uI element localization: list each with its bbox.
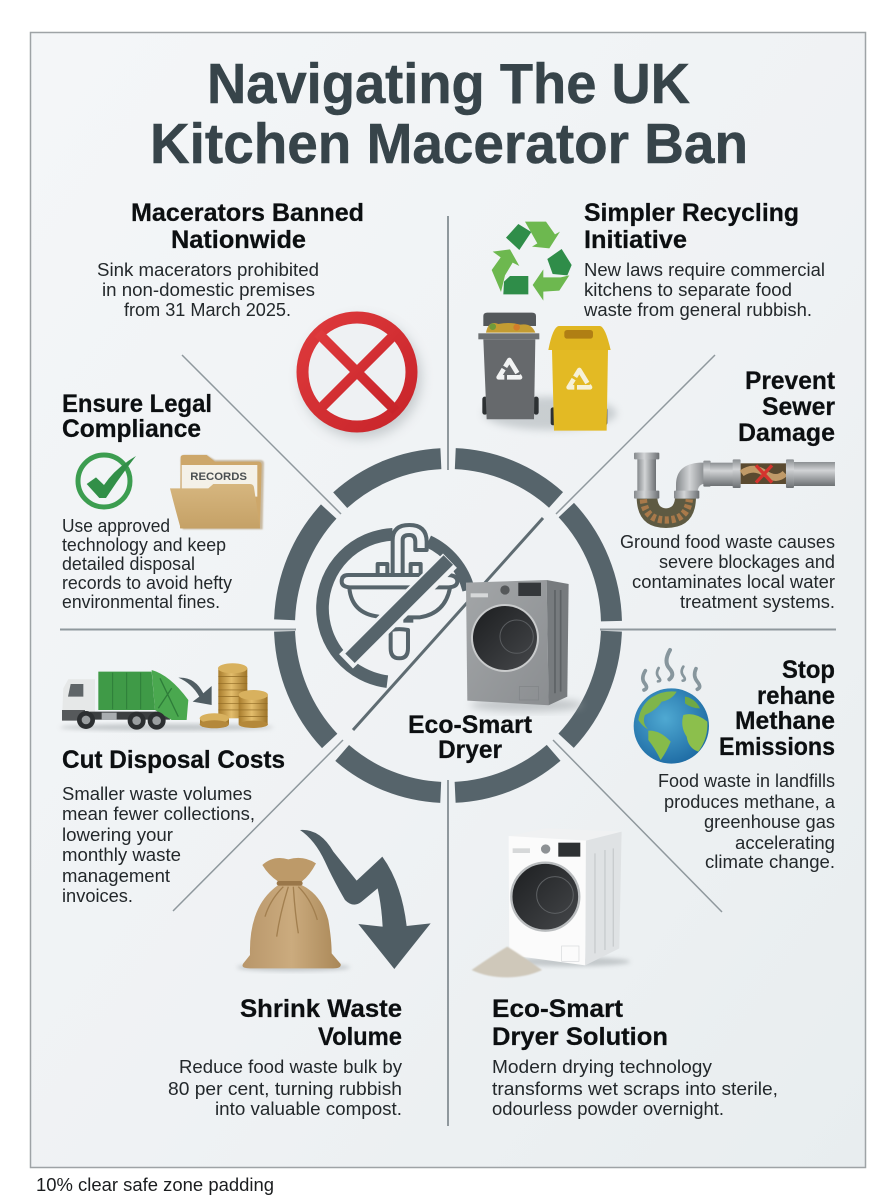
icon: recycling arrows bbox=[492, 222, 572, 301]
title bbox=[150, 52, 748, 176]
central hub: no-sink icon and dryer bbox=[322, 518, 583, 764]
icon: earth with methane wisps bbox=[634, 650, 709, 764]
icon: burlap sack bbox=[237, 858, 350, 971]
body text: New laws require commercial bbox=[584, 259, 825, 280]
heading: Simpler Recycling bbox=[584, 199, 799, 227]
label: Eco-Smart Dryer: Dryer bbox=[438, 736, 502, 764]
heading: Methane bbox=[735, 707, 835, 735]
body text: treatment systems. bbox=[680, 591, 835, 612]
divider spokes bbox=[60, 216, 836, 1126]
body text: Smaller waste volumes bbox=[62, 783, 252, 804]
heading bbox=[62, 390, 212, 443]
heading: Initiative bbox=[584, 226, 687, 254]
panel: ensure legal compliance bbox=[62, 390, 264, 612]
body text bbox=[97, 259, 319, 320]
heading: Shrink Waste bbox=[240, 995, 402, 1023]
heading: Macerators Banned bbox=[131, 199, 364, 227]
icon: red prohibition circle bbox=[301, 318, 421, 438]
icon: records folder: RECORDS bbox=[190, 471, 247, 483]
heading: Eco-Smart bbox=[492, 995, 624, 1023]
caption: 10% clear safe zone padding bbox=[36, 1175, 274, 1195]
panel: stop methane emissions bbox=[634, 650, 836, 872]
body text: monthly waste bbox=[62, 844, 181, 865]
body text: kitchens to separate food bbox=[584, 279, 792, 300]
heading: Sewer bbox=[762, 393, 835, 421]
body text: Ground food waste causes bbox=[620, 531, 835, 552]
heading bbox=[719, 656, 835, 761]
body text bbox=[62, 515, 233, 612]
body text: management bbox=[62, 865, 170, 886]
icon: prohibited sink bbox=[322, 525, 469, 682]
body text: transforms wet scraps into sterile, bbox=[492, 1078, 778, 1099]
heading: Volume bbox=[318, 1023, 402, 1051]
heading bbox=[584, 199, 799, 254]
heading: Nationwide bbox=[171, 226, 306, 254]
heading bbox=[131, 199, 364, 254]
body text: greenhouse gas bbox=[704, 811, 835, 832]
icon: white dryer and powder bbox=[472, 828, 630, 977]
panel: shrink waste volume bbox=[168, 830, 431, 1119]
body text: invoices. bbox=[62, 885, 133, 906]
heading: rehane bbox=[757, 682, 835, 710]
body text: records to avoid hefty bbox=[62, 572, 233, 593]
body text: odourless powder overnight. bbox=[492, 1098, 724, 1119]
heading: Compliance bbox=[62, 415, 201, 443]
body text: Sink macerators prohibited bbox=[97, 259, 319, 280]
panel: prevent sewer damage bbox=[620, 367, 836, 612]
body text: climate change. bbox=[705, 851, 835, 872]
body text bbox=[62, 783, 255, 906]
central segmented ring bbox=[277, 452, 619, 799]
icon: clogged pipe bbox=[634, 453, 835, 528]
body text: detailed disposal bbox=[62, 553, 195, 574]
title: Navigating The UK bbox=[207, 52, 690, 116]
icon: records folder bbox=[170, 455, 264, 529]
icon: waste bins bbox=[478, 313, 617, 431]
body text: Use approved bbox=[62, 515, 170, 536]
body text: contaminates local water bbox=[632, 571, 835, 592]
title: Kitchen Macerator Ban bbox=[150, 112, 748, 176]
body text bbox=[168, 1056, 403, 1119]
heading: Prevent bbox=[745, 367, 836, 395]
panel: cut disposal costs bbox=[60, 663, 285, 906]
icon: truck and coins bbox=[60, 663, 273, 731]
body text bbox=[658, 770, 836, 872]
body text bbox=[620, 531, 835, 612]
body text: 80 per cent, turning rubbish bbox=[168, 1078, 402, 1099]
body text: accelerating bbox=[735, 832, 835, 853]
body text: Reduce food waste bulk by bbox=[179, 1056, 403, 1077]
label: Eco-Smart Dryer bbox=[408, 711, 533, 764]
heading: Emissions bbox=[719, 733, 835, 761]
heading: Dryer Solution bbox=[492, 1023, 668, 1051]
body text: Food waste in landfills bbox=[658, 770, 835, 791]
body text: environmental fines. bbox=[62, 591, 220, 612]
body text: lowering your bbox=[62, 824, 173, 845]
body text: from 31 March 2025. bbox=[124, 299, 291, 320]
panel: macerators banned bbox=[97, 199, 421, 438]
body text: in non-domestic premises bbox=[102, 279, 315, 300]
body text: severe blockages and bbox=[659, 551, 835, 572]
body text: produces methane, a bbox=[664, 791, 836, 812]
heading: Damage bbox=[738, 419, 835, 447]
heading bbox=[240, 995, 402, 1051]
icon: green check bbox=[78, 455, 136, 507]
heading bbox=[738, 367, 836, 447]
heading bbox=[492, 995, 668, 1051]
body text bbox=[583, 259, 825, 320]
heading: Stop bbox=[782, 656, 835, 684]
panel: eco-smart dryer solution bbox=[472, 828, 778, 1119]
body text: technology and keep bbox=[62, 534, 226, 555]
heading: Cut Disposal Costs bbox=[62, 746, 285, 774]
body text: waste from general rubbish. bbox=[583, 299, 812, 320]
body text: into valuable compost. bbox=[215, 1098, 402, 1119]
diagonal hub divider bbox=[353, 518, 543, 730]
icon: downward zigzag arrow bbox=[300, 830, 431, 969]
body text: Modern drying technology bbox=[492, 1056, 713, 1077]
body text: mean fewer collections, bbox=[62, 803, 255, 824]
label: Eco-Smart Dryer: Eco-Smart bbox=[408, 711, 533, 739]
icon: grey dryer bbox=[466, 580, 583, 712]
body text bbox=[492, 1056, 778, 1119]
panel: simpler recycling bbox=[478, 199, 825, 431]
heading: Ensure Legal bbox=[62, 390, 212, 418]
